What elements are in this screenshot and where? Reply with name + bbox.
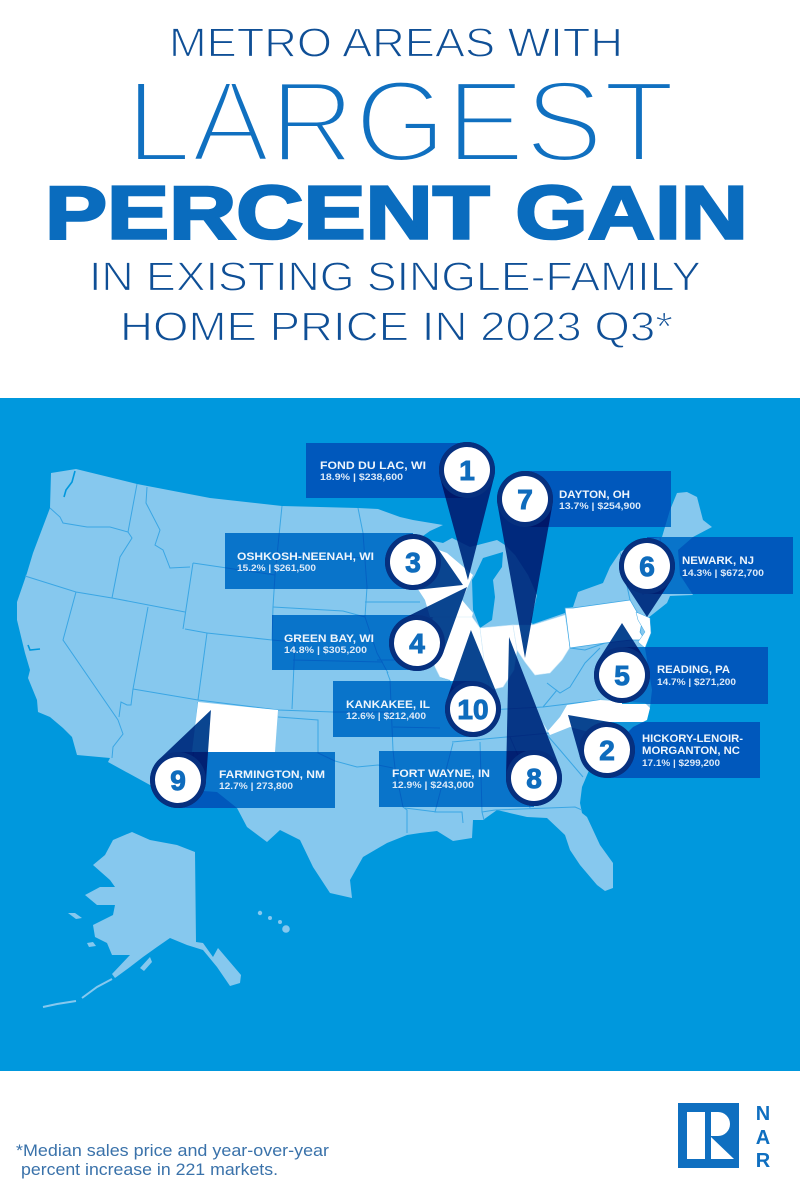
logo: NAR realtor R (678, 1103, 771, 1172)
callout 10: kankakee: 12.6% | $212,400 (346, 711, 426, 722)
callout 2: hickory-lenoir-morganton: MORGANTON, NC (642, 745, 740, 757)
logo letters: R (756, 1150, 771, 1172)
callout 5: reading: READING, PA (657, 664, 730, 676)
highlighted state: ohio (513, 615, 570, 675)
pin 8 (481, 632, 566, 810)
callout 9: farmington: 9 (170, 765, 186, 796)
logo letters (756, 1103, 771, 1172)
callout 1: fond du lac (306, 442, 496, 580)
callout 2: hickory-lenoir-morganton: 17.1% | $299,200 (642, 758, 720, 769)
callout 9: farmington: 12.7% | 273,800 (219, 781, 293, 792)
map: contiguous United States (17, 469, 712, 898)
highlighted state: new mexico (192, 702, 278, 752)
title line: in existing single-family: IN EXISTING SINGLE-FAMILY (89, 254, 701, 300)
footnote (16, 1142, 330, 1179)
highlighted state: illinois (428, 617, 492, 708)
callout 8: fort wayne: 8 (526, 763, 542, 794)
highlighted state: wisconsin (412, 545, 473, 617)
callout 4: green bay: 4 (409, 628, 425, 659)
title line: largest: LARGEST (126, 56, 675, 186)
logo letters: A (756, 1127, 770, 1149)
callout 7: dayton: DAYTON, OH (559, 489, 630, 501)
callout 1: fond du lac: FOND DU LAC, WI (320, 460, 426, 472)
callout 6: newark: 6 (639, 551, 655, 582)
highlighted state: new jersey (636, 612, 651, 648)
pin 9 (141, 698, 236, 817)
lake michigan (472, 552, 503, 628)
callout 10: kankakee: KANKAKEE, IL (346, 699, 430, 711)
callout 3: oshkosh-neenah: 15.2% | $261,500 (237, 563, 316, 574)
title line: percent gain: PERCENT GAIN (45, 171, 748, 255)
callout 4: green bay (272, 568, 488, 683)
logo letters: N (756, 1103, 770, 1125)
pin 3 (376, 525, 475, 610)
callout 10: kankakee: 10 (457, 694, 489, 725)
callout 8: fort wayne: 12.9% | $243,000 (392, 780, 474, 791)
callout 3: oshkosh-neenah (225, 525, 475, 610)
callout 6: newark (619, 537, 793, 617)
callout 2: hickory-lenoir-morganton (549, 694, 760, 790)
footnote: percent increase in 221 markets. (21, 1161, 278, 1179)
panel: map background (0, 398, 800, 1071)
callout 3: oshkosh-neenah: 3 (405, 547, 421, 578)
callout 6: newark: 14.3% | $672,700 (682, 568, 764, 579)
title (45, 20, 748, 350)
callout 8: fort wayne (379, 632, 566, 810)
callout 6: newark: NEWARK, NJ (682, 555, 754, 567)
callout 3: oshkosh-neenah: OSHKOSH-NEENAH, WI (237, 551, 374, 563)
footnote: *Median sales price and year-over-year (16, 1142, 330, 1160)
pin 2 (549, 694, 647, 790)
callout 4: green bay: GREEN BAY, WI (284, 633, 374, 645)
callout 1: fond du lac: 18.9% | $238,600 (320, 472, 403, 483)
pin 7 (497, 471, 553, 658)
callout 1: fond du lac: 1 (459, 455, 475, 486)
title line: metro areas with: METRO AREAS WITH (169, 20, 623, 66)
callout 9: farmington (141, 698, 335, 817)
callout 2: hickory-lenoir-morganton: HICKORY-LENOIR- (642, 733, 743, 745)
callout 4: green bay: 14.8% | $305,200 (284, 645, 367, 656)
highlighted state: pennsylvania (565, 600, 645, 648)
highlighted state: indiana (480, 625, 517, 690)
state border lines (25, 484, 662, 833)
callout 2: hickory-lenoir-morganton: 2 (599, 735, 615, 766)
callout 7: dayton: 13.7% | $254,900 (559, 501, 641, 512)
callout 5: reading: 5 (614, 660, 630, 691)
map: alaska (43, 832, 241, 1007)
pin 4 (377, 568, 488, 683)
highlighted state: north carolina (543, 700, 650, 735)
callout 5: reading: 14.7% | $271,200 (657, 677, 736, 688)
pin 5 (594, 623, 650, 703)
callout 5: reading (594, 623, 768, 704)
callout 7: dayton (497, 471, 671, 658)
callout 10: kankakee (333, 629, 502, 738)
callout 7: dayton: 7 (517, 484, 533, 515)
callout 9: farmington: FARMINGTON, NM (219, 769, 325, 781)
title line: home price in 2023 q3: HOME PRICE IN 2023 Q3* (120, 304, 673, 350)
map: hawaii (258, 911, 290, 933)
pin 10 (443, 629, 502, 738)
pin 1 (439, 442, 496, 580)
callout 8: fort wayne: FORT WAYNE, IN (392, 768, 490, 780)
pin 6 (619, 538, 675, 617)
